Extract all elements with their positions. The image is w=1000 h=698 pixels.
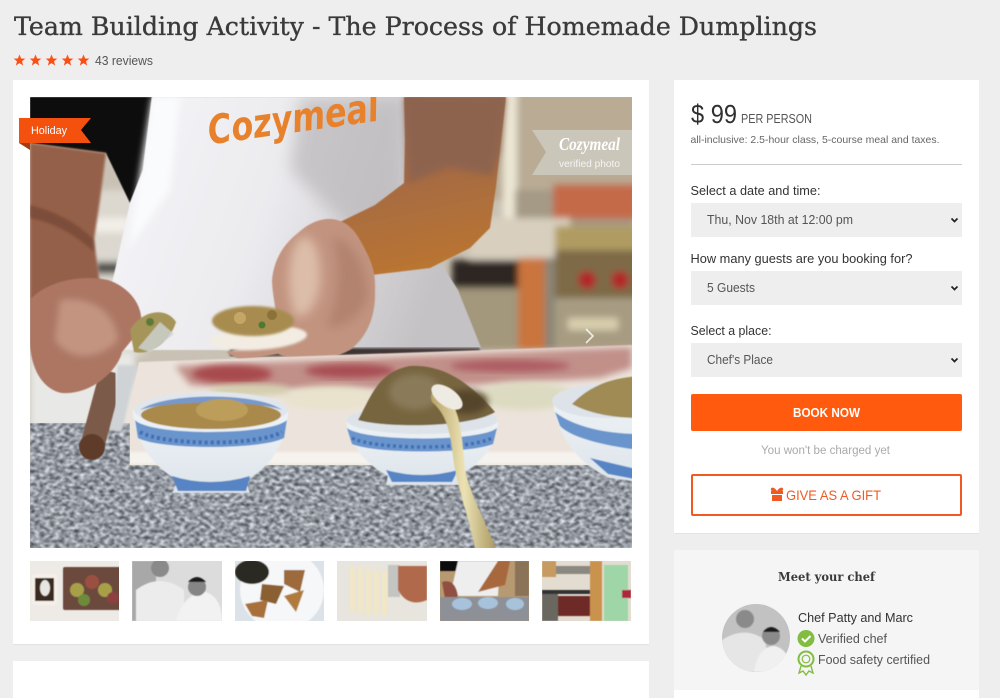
thumbnail 6: kitchen <box>542 561 631 621</box>
kitchen background <box>85 90 640 355</box>
thumbnail 2: chefs portrait <box>132 559 222 621</box>
price: $ 99 <box>691 99 737 129</box>
dumpling in hand <box>210 326 308 352</box>
bowl 3 <box>552 376 632 482</box>
date select <box>690 184 962 237</box>
review count: 43 reviews <box>95 54 153 68</box>
book now button <box>691 394 962 431</box>
date select: Select a date and time: <box>690 184 820 198</box>
place select <box>690 324 962 377</box>
icon: gift <box>771 488 783 501</box>
next arrow <box>586 329 593 343</box>
rating: stars and review count <box>14 54 153 68</box>
holiday ribbon tag: Holiday <box>31 125 67 137</box>
granite counter <box>30 423 632 548</box>
place select: Chef's Place <box>707 353 773 367</box>
rolling pin <box>79 372 112 460</box>
chef name: Chef Patty and Marc <box>798 611 913 625</box>
left hand and spoon <box>30 278 176 393</box>
guests select: 5 Guests <box>707 281 755 295</box>
right hand <box>226 219 375 360</box>
give as a gift button <box>692 475 961 515</box>
main photo: chef filling dumplings <box>30 85 660 552</box>
place select: Select a place: <box>690 324 772 338</box>
verified photo ribbon: Cozymeal <box>559 134 620 154</box>
table paper with dough and meat <box>114 345 640 470</box>
thumbnail 3: pan-fried dumplings on plate <box>235 561 324 621</box>
give as a gift button: GIVE AS A GIFT <box>786 487 881 503</box>
verified chef badge: Verified chef <box>818 632 888 646</box>
foil strip <box>108 365 137 432</box>
guests select <box>690 252 962 305</box>
panel: description card (cropped) <box>13 661 649 698</box>
price <box>691 99 812 129</box>
left arm <box>30 143 106 300</box>
thumbnail 5: cooking overview <box>440 561 529 621</box>
left white counter <box>30 352 135 427</box>
thumbnail 4: rolled dough on board <box>337 561 427 621</box>
verified photo ribbon: verified photo <box>559 159 620 170</box>
title: Team Building Activity - The Process of Homemade Dumplings <box>14 12 817 41</box>
not charged note: You won't be charged yet <box>761 445 891 457</box>
book now button: BOOK NOW <box>793 406 860 420</box>
heading: Meet your chef <box>778 569 876 584</box>
price: PER PERSON <box>741 112 812 126</box>
chef avatar <box>722 604 792 672</box>
apron logo text: Cozymeal <box>205 85 383 154</box>
price note: all-inclusive: 2.5-hour class, 5-course meal and taxes. <box>690 134 940 146</box>
verified photo ribbon <box>532 130 640 175</box>
food safety badge <box>798 652 930 675</box>
bowl 1 <box>133 392 288 493</box>
right arm <box>340 97 506 275</box>
thumbnail 1: plated dumplings <box>30 561 123 621</box>
panel: booking card <box>674 80 979 534</box>
shadow under apron <box>230 348 480 356</box>
spoon <box>430 384 496 548</box>
bowl 2 <box>346 366 498 485</box>
date select: Thu, Nov 18th at 12:00 pm <box>707 213 853 227</box>
food safety badge: Food safety certified <box>818 653 930 667</box>
black shirt <box>30 97 152 203</box>
holiday ribbon tag <box>19 118 91 150</box>
icon: five stars <box>14 54 89 66</box>
apron <box>112 97 482 350</box>
verified chef badge <box>798 630 888 647</box>
guests select: How many guests are you booking for? <box>690 252 913 266</box>
panel: photo gallery card <box>13 80 660 645</box>
panel: meet your chef <box>674 572 979 698</box>
